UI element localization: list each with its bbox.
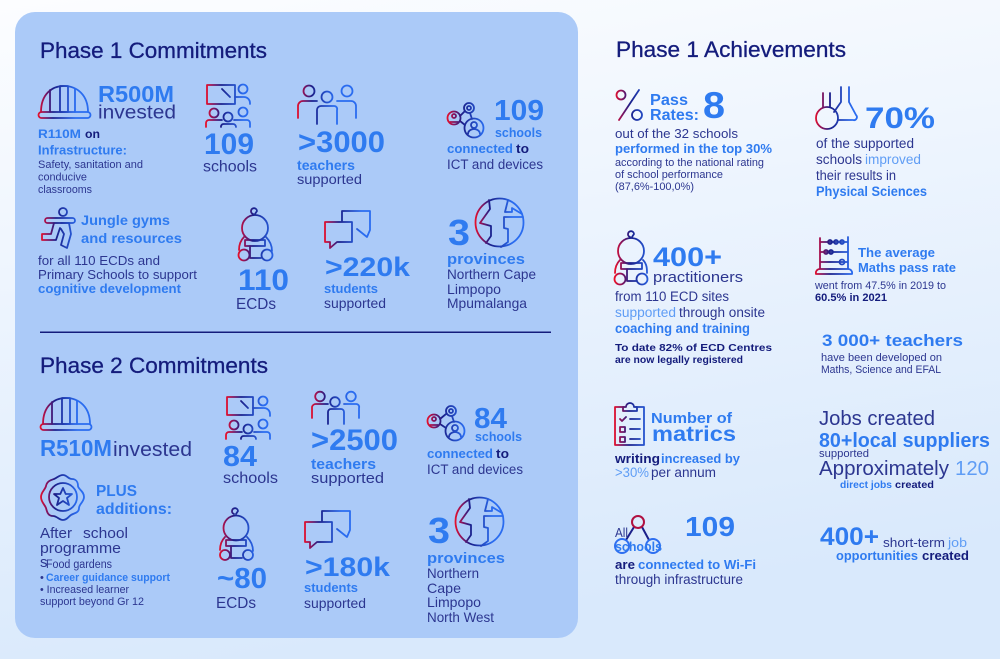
- icon: classroom phase 2: [226, 396, 270, 439]
- stat: teachers supported: supported: [297, 171, 362, 187]
- text: all schools on wifi: All: [615, 525, 628, 540]
- stat: 220k students: supported: [324, 296, 386, 311]
- text: plus additions: PLUS: [96, 483, 137, 500]
- text: infrastructure: conducive: [38, 172, 87, 184]
- icon: flasks: [816, 87, 857, 129]
- stat: 220k students: students: [324, 281, 378, 296]
- text: after school programme list: After: [40, 525, 72, 542]
- stat: 84 schools connected: schools: [475, 429, 522, 444]
- stat: 180k students: students: [304, 580, 358, 595]
- text: pass rates detail: out of the 32 schools: [615, 126, 738, 141]
- text: short-term opportunities: [820, 523, 969, 563]
- text: short-term opportunities: short-term: [883, 535, 945, 550]
- stat: R500M invested: R500M: [98, 81, 174, 107]
- stat: pass rates: Pass: [650, 92, 688, 109]
- stat: 2500 teachers: supported: [311, 471, 384, 487]
- text: after school programme list: Food gardens: [46, 559, 112, 571]
- stat: 3 provinces phase 2: Limpopo: [427, 594, 481, 610]
- text: after school programme list: Career guidance support: [46, 572, 170, 584]
- text: jungle gyms: Primary Schools to support: [38, 267, 197, 282]
- text: all schools on wifi: schools: [615, 539, 662, 554]
- text: maths pass rate: The average: [858, 246, 935, 260]
- text: matrics detail: >30%: [615, 465, 649, 480]
- text: maths pass rate: went from 47.5% in 2019 to: [814, 280, 946, 292]
- stat: pass rates: Rates:: [650, 107, 699, 124]
- text: after school programme list: programme: [40, 540, 121, 557]
- text: 3000 teachers: Maths, Science and EFAL: [821, 364, 941, 376]
- text: ECD coaching: To date 82% of ECD Centres: [615, 342, 772, 354]
- text: ECD coaching: are now legally registered: [615, 354, 743, 366]
- stat: R510M invested: R510M: [40, 435, 112, 461]
- text: pass rates detail: (87,6%-100,0%): [615, 181, 694, 193]
- text: matrics detail: increased by: [661, 451, 741, 466]
- stat: number of matrics: matrics: [652, 423, 736, 446]
- stat: 3 provinces: [447, 212, 536, 311]
- icon: runner: [42, 208, 75, 248]
- stat: teachers supported: teachers: [297, 157, 355, 173]
- stat: 3 provinces phase 2: 3: [428, 510, 450, 551]
- text: physical sciences: schools: [816, 152, 862, 167]
- icon: child achievements: [614, 231, 648, 284]
- stat: R510M invested: [40, 435, 192, 461]
- stat: 84 schools connected: to: [496, 446, 509, 461]
- text: after school programme list: s: [40, 554, 48, 571]
- stat: 109 schools: 109: [204, 128, 254, 161]
- stat: 3 provinces: provinces: [447, 251, 525, 268]
- stat: 84 schools connected: connected: [427, 446, 493, 461]
- text: after school programme list: support beyond Gr 12: [40, 596, 144, 608]
- stat: 3 provinces phase 2: [427, 510, 505, 625]
- text: physical sciences: their results in: [816, 168, 896, 183]
- text: ECD coaching: from 110 ECD sites: [615, 289, 729, 304]
- icon: hard hat phase 2: [40, 398, 92, 430]
- stat: 400 practitioners: practitioners: [653, 269, 743, 286]
- icon: speech bubbles phase 2: [305, 511, 350, 548]
- text: jungle gyms: [38, 212, 197, 296]
- stat: 400 practitioners: [653, 242, 743, 286]
- icon: classroom: [206, 84, 250, 127]
- text: plus additions: additions:: [96, 501, 172, 518]
- stat: 110 ECDs: [236, 264, 289, 313]
- stat: 109 schools connected: schools: [495, 125, 542, 140]
- heading: Phase 1 Achievements: Phase 1 Achievements: [616, 37, 846, 62]
- text: jungle gyms: for all 110 ECDs and: [38, 253, 160, 268]
- stat: 2500 teachers: teachers: [311, 456, 376, 473]
- text: all schools on wifi: are: [615, 557, 635, 572]
- stat: 2500 teachers: >2500: [311, 424, 398, 457]
- stat: 3 provinces: Northern Cape: [447, 266, 536, 282]
- stat: pass rates: 8: [703, 85, 725, 126]
- icon: globe phase 2: [456, 498, 504, 546]
- icon: percent: [616, 90, 642, 120]
- text: jobs created: Jobs created: [819, 408, 935, 430]
- text: jobs created: supported: [819, 448, 869, 460]
- stat: R500M invested: invested: [98, 102, 176, 124]
- text: short-term opportunities: created: [922, 548, 969, 563]
- stat: 109 schools connected: [447, 95, 544, 172]
- icon: connected network: [448, 103, 484, 138]
- text: ECD coaching: through onsite: [679, 305, 765, 320]
- stat: 180k students: [304, 552, 391, 611]
- stat: 220k students: [324, 252, 411, 311]
- text: jobs created: direct jobs: [840, 479, 892, 491]
- text: all schools on wifi: connected to Wi-Fi: [638, 557, 756, 572]
- text: jobs created: 80+local suppliers: [819, 430, 990, 452]
- stat: 109 schools connected: to: [516, 141, 529, 156]
- icon: child phase 2: [220, 508, 253, 560]
- icon: abacus: [816, 237, 852, 274]
- text: infrastructure: on: [85, 127, 100, 141]
- text: matrics detail: per annum: [651, 465, 716, 480]
- text: ECD coaching: supported: [615, 305, 676, 320]
- stat: 70 percent: 70%: [865, 102, 935, 135]
- text: after school programme list: [40, 525, 170, 608]
- text: maths pass rate: Maths pass rate: [858, 261, 956, 275]
- text: matrics detail: [614, 451, 741, 480]
- text: short-term opportunities: 400+: [820, 523, 879, 551]
- icon: three teachers phase 2: [312, 392, 359, 424]
- stat: 109 schools: schools: [203, 158, 257, 176]
- text: pass rates detail: [615, 126, 772, 193]
- stat: 109 schools connected: 109: [494, 95, 544, 127]
- text: after school programme list: •: [40, 572, 44, 584]
- text: infrastructure: Safety, sanitation and: [38, 159, 143, 171]
- text: jungle gyms: and resources: [81, 230, 182, 246]
- text: pass rates detail: of school performance: [615, 169, 723, 181]
- icon: clipboard: [615, 403, 644, 445]
- text: 3000 teachers: have been developed on: [821, 352, 942, 364]
- text: ECD coaching: [615, 289, 772, 366]
- icon: speech bubbles: [325, 211, 370, 248]
- stat: 400 practitioners: 400+: [653, 242, 722, 272]
- text: after school programme list: • Increased learner: [40, 584, 129, 596]
- text: physical sciences: improved: [865, 152, 921, 167]
- panel: commitments: [15, 12, 578, 638]
- text: matrics detail: writing: [614, 451, 660, 466]
- text: physical sciences: Physical Sciences: [816, 184, 927, 199]
- heading: Phase 2 Commitments: Phase 2 Commitments: [40, 353, 268, 378]
- stat: teachers supported: [297, 126, 385, 187]
- text: 3000 teachers: 3 000+ teachers: [822, 331, 963, 350]
- stat: 109 schools connected: connected: [447, 141, 513, 156]
- stat: 84 schools connected: [427, 403, 523, 477]
- icon: connected network phase 2: [428, 406, 464, 440]
- stat: R510M invested: invested: [113, 439, 192, 461]
- text: all schools on wifi: [615, 511, 756, 587]
- stat: 84 schools connected: ICT and devices: [427, 462, 523, 477]
- text: short-term opportunities: job: [947, 535, 967, 550]
- text: jungle gyms: cognitive development: [38, 281, 182, 296]
- stat: 180k students: >180k: [305, 552, 391, 582]
- stat: 2500 teachers: [311, 424, 398, 487]
- text: pass rates detail: according to the national rating: [615, 157, 764, 169]
- stat: 109 schools connected: ICT and devices: [447, 157, 543, 172]
- text: after school programme list: school: [83, 525, 128, 542]
- stat: 110 ECDs: ECDs: [236, 296, 276, 313]
- stat: 3 provinces phase 2: North West: [427, 609, 494, 625]
- text: all schools on wifi: through infrastructure: [615, 572, 743, 587]
- panel: achievements: [614, 37, 990, 587]
- stat: teachers supported: >3000: [298, 126, 385, 159]
- text: jobs created: created: [895, 479, 934, 491]
- text: maths pass rate: 60.5% in 2021: [815, 292, 887, 304]
- text: short-term opportunities: opportunities: [836, 548, 918, 563]
- stat: 220k students: >220k: [325, 252, 411, 282]
- stat: 109 schools: [203, 128, 257, 176]
- text: infrastructure: [38, 127, 143, 196]
- stat: 3 provinces phase 2: Northern: [427, 565, 479, 581]
- icon: child with laptop: [238, 208, 272, 260]
- stat: 3 provinces: Mpumalanga: [447, 295, 527, 311]
- text: jobs created: 120: [955, 458, 989, 480]
- icon: wifi network: [615, 516, 660, 553]
- icon: three teachers: [298, 86, 356, 124]
- stat: 110 ECDs: 110: [238, 264, 289, 297]
- stat: 84 schools: schools: [223, 470, 278, 487]
- heading: Phase 1 Commitments: Phase 1 Commitments: [40, 38, 267, 63]
- stat: 80 ECDs: [216, 563, 267, 612]
- text: jungle gyms: Jungle gyms: [81, 212, 170, 228]
- stat: 180k students: supported: [304, 596, 366, 611]
- text: infrastructure: classrooms: [38, 184, 92, 196]
- stat: number of matrics: [651, 410, 736, 446]
- stat: 84 schools: [223, 441, 278, 487]
- text: physical sciences: [816, 136, 927, 199]
- text: 3000 teachers: [821, 331, 963, 376]
- stat: 80 ECDs: ~80: [217, 563, 267, 595]
- text: jobs created: [819, 408, 990, 491]
- stat: 80 ECDs: ECDs: [216, 595, 256, 612]
- icon: globe: [476, 198, 524, 247]
- stat: 3 provinces phase 2: Cape: [427, 580, 461, 596]
- text: physical sciences: of the supported: [816, 136, 914, 151]
- stat: 3 provinces phase 2: provinces: [427, 550, 505, 567]
- stat: R500M invested: [98, 81, 176, 124]
- icon: badge with star: [41, 475, 84, 520]
- text: infrastructure: Infrastructure:: [38, 144, 127, 158]
- icon: hard hat: [38, 86, 90, 118]
- text: ECD coaching: coaching and training: [615, 321, 750, 336]
- stat: 84 schools connected: 84: [474, 403, 507, 435]
- text: pass rates detail: performed in the top 30%: [615, 141, 772, 156]
- text: maths pass rate: [814, 246, 956, 304]
- stat: pass rates: [650, 85, 725, 126]
- stat: 84 schools: 84: [223, 441, 257, 473]
- stat: 3 provinces: Limpopo: [447, 281, 501, 297]
- text: plus additions: [96, 483, 172, 518]
- text: jobs created: Approximately: [819, 458, 949, 480]
- text: infrastructure: R110M: [38, 127, 81, 141]
- text: all schools on wifi: 109: [685, 511, 735, 542]
- stat: number of matrics: Number of: [651, 410, 733, 427]
- stat: 3 provinces: 3: [448, 212, 470, 253]
